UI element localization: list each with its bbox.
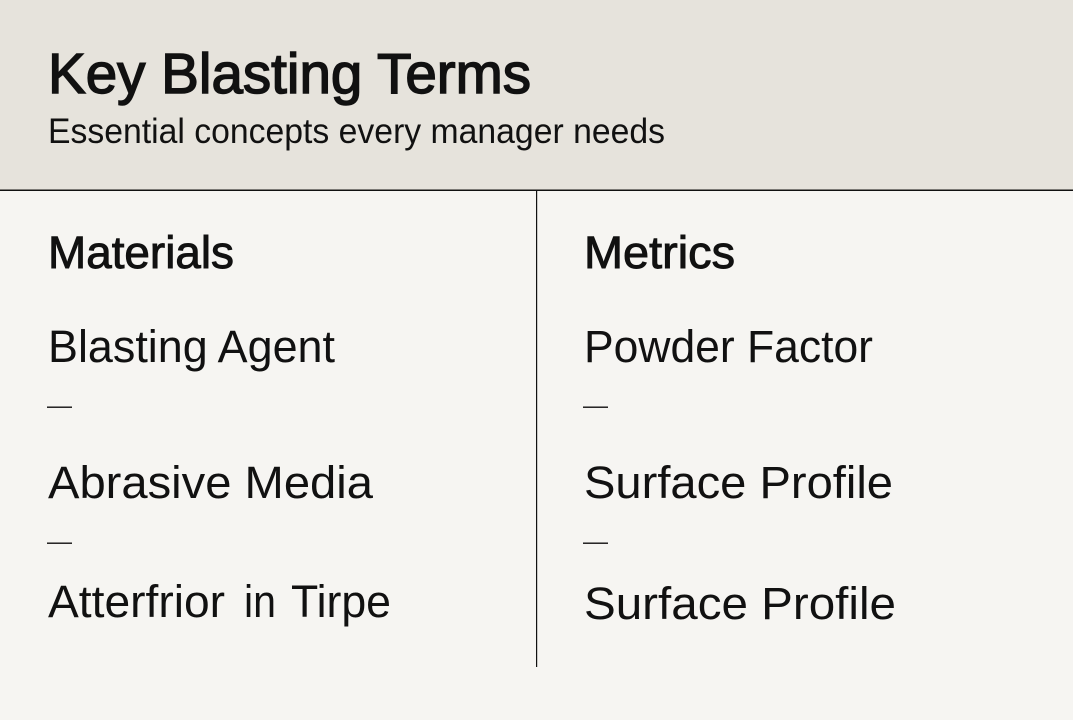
header panel [0, 0, 1073, 190]
term: powder factor: Powder Factor [584, 321, 873, 372]
term: surface profile repeat: Surface Profile [584, 578, 896, 629]
term: garbled third entry: Atterfrior [48, 576, 225, 627]
header divider [0, 190, 1073, 191]
panel: materials [47, 227, 391, 627]
column divider [536, 190, 537, 667]
separator dash [47, 406, 72, 408]
title: Key Blasting Terms [48, 42, 531, 106]
term: abrasive media: Abrasive Media [48, 457, 374, 508]
term: garbled third entry: in [244, 576, 276, 627]
term: garbled third entry: Tirpe [291, 576, 391, 627]
subtitle: Essential concepts every manager needs [48, 112, 665, 151]
term: blasting agent: Blasting Agent [48, 321, 335, 372]
heading: materials: Materials [48, 227, 234, 278]
panel: metrics [583, 227, 896, 629]
separator dash [583, 406, 608, 408]
term: garbled third entry [48, 576, 391, 627]
separator dash [583, 542, 608, 544]
term: surface profile: Surface Profile [584, 457, 893, 508]
separator dash [47, 542, 72, 544]
heading: metrics: Metrics [584, 227, 735, 278]
